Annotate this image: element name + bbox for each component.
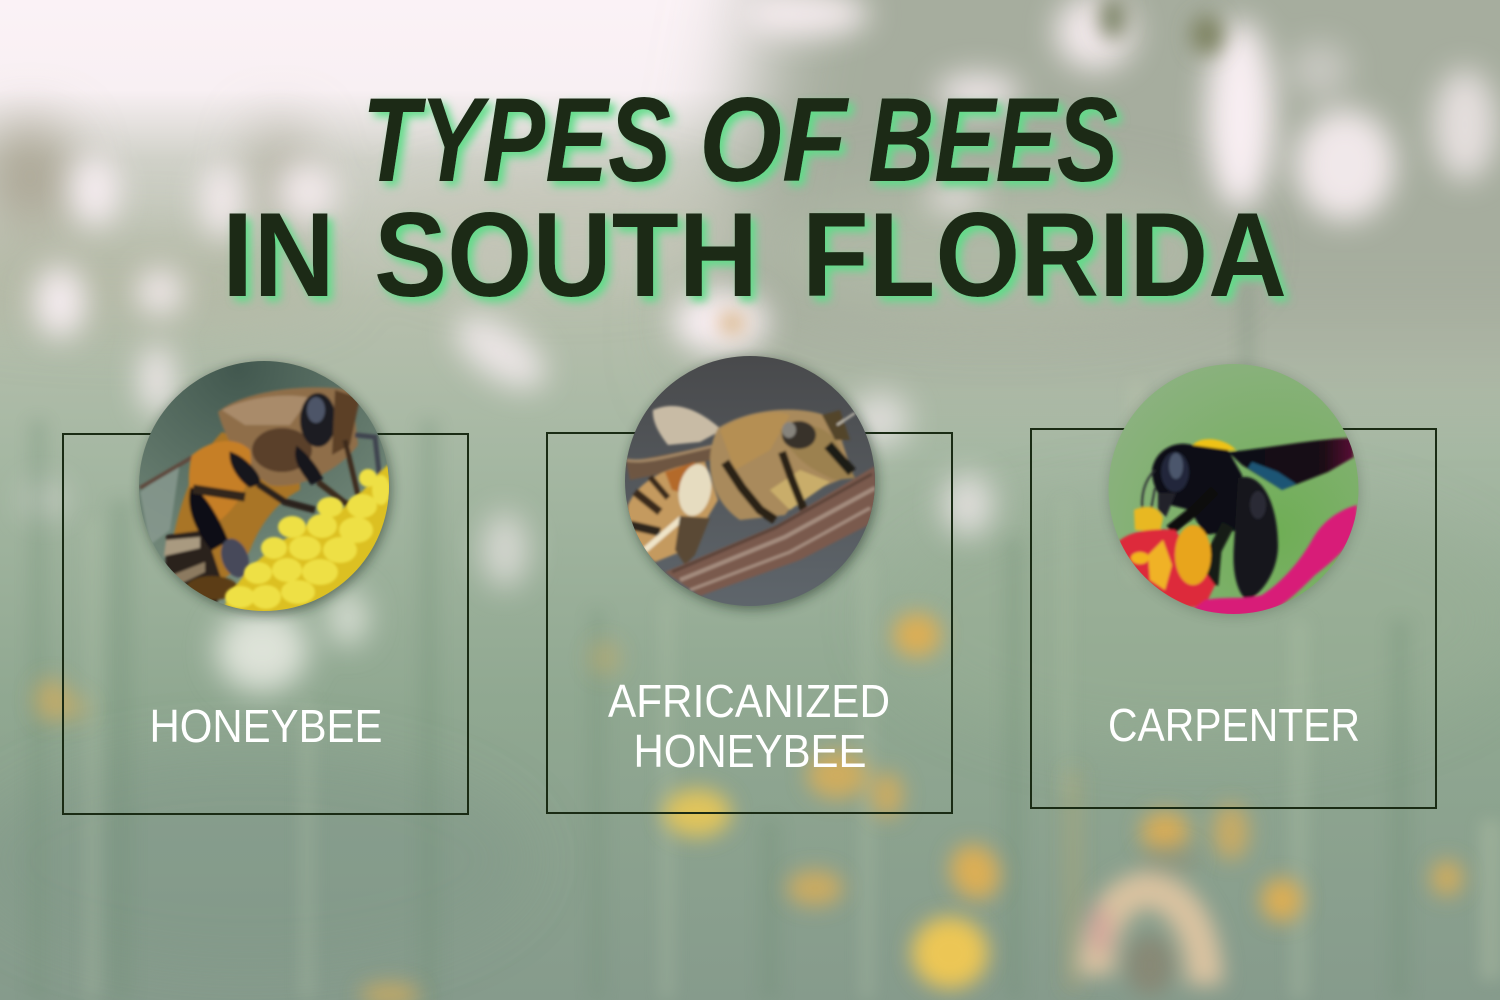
title line 2: SOUTH — [374, 188, 758, 322]
carpenter frame — [1031, 429, 1436, 808]
africanized label: AFRICANIZED — [608, 675, 890, 727]
meadow grass streaks — [30, 280, 1410, 1000]
panel: africanized honeybee — [547, 350, 952, 813]
africanized frame — [547, 433, 952, 813]
icon: honeybee on yellow flower — [139, 361, 389, 611]
honeybee photo circle shadow — [141, 364, 391, 614]
daisy blurred ring — [216, 590, 368, 692]
upper-right foliage haze — [700, 0, 1500, 360]
icon: carpenter bee on zinnia — [1108, 364, 1358, 614]
title line 1: OF — [699, 73, 849, 207]
blurred yellow flowers — [34, 613, 1463, 1000]
honeybee frame — [63, 434, 468, 814]
honeybee label: HONEYBEE — [150, 700, 382, 752]
africanized photo circle shadow — [627, 359, 877, 609]
carpenter photo circle shadow — [1109, 366, 1359, 616]
icon: africanized honeybee on twig — [620, 350, 880, 610]
title line 2: FLORIDA — [802, 188, 1287, 322]
carpenter label: CARPENTER — [1108, 699, 1360, 751]
title — [222, 73, 1287, 322]
title line 1: BEES — [868, 73, 1118, 207]
pale blurred blossoms — [23, 0, 1497, 588]
title line 1: TYPES — [362, 73, 671, 207]
panel: carpenter — [1031, 360, 1436, 808]
title line 2: IN — [222, 188, 335, 322]
africanized label line 2: HONEYBEE — [634, 725, 866, 777]
panel: honeybee — [63, 355, 468, 814]
